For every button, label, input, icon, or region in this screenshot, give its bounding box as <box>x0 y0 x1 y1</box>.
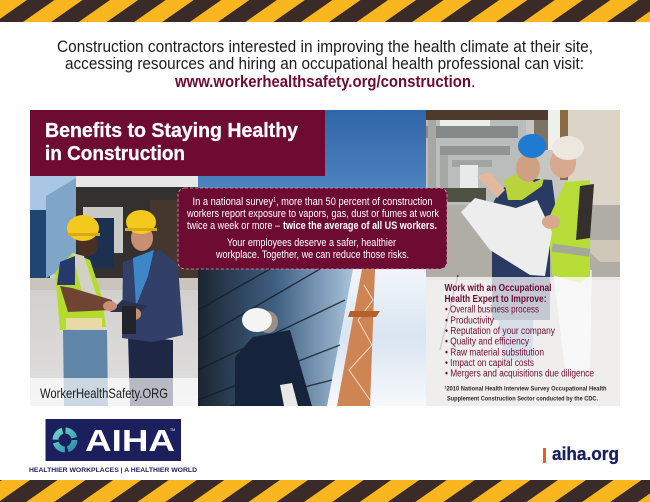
callout: survey statistic: Your employees deserve a safer, healthier <box>227 237 396 249</box>
blue helmet <box>518 134 546 158</box>
photo: man in white helmet looking at glass building and crane <box>198 269 426 406</box>
title panel: in Construction <box>45 143 185 165</box>
intro text: Construction contractors interested in improving the health climate at their site, <box>57 38 593 56</box>
worker head <box>78 237 98 256</box>
blueprint sheet <box>461 198 552 276</box>
man helmet <box>242 308 272 332</box>
photo: two engineers reviewing blueprint <box>426 110 620 406</box>
logo tagline: HEALTHIER WORKPLACES | A HEALTHIER WORLD <box>29 468 198 474</box>
list: occupational health expert benefits: • Productivity <box>445 315 494 326</box>
callout: survey statistic: twice the average of all US workers. <box>283 220 437 232</box>
callout: survey statistic: In a national survey <box>192 196 286 208</box>
engineer legs <box>498 320 534 360</box>
callout: survey statistic: 1 <box>273 198 277 204</box>
list: occupational health expert benefits: Work with an Occupational <box>444 283 552 294</box>
manager legs <box>128 336 173 406</box>
manager head <box>131 231 153 251</box>
website caption strip <box>30 378 198 406</box>
list: occupational health expert benefits: • Raw material substitution <box>445 347 544 358</box>
man body <box>235 330 312 406</box>
image panel: sky behind title and callout <box>198 110 426 270</box>
hazard stripe band: top <box>0 0 650 22</box>
crane tower <box>337 269 375 406</box>
manager suit <box>122 250 183 342</box>
footnote: Supplement Construction Sector conducted by the CDC. <box>447 396 598 403</box>
callout: survey statistic <box>178 188 447 269</box>
intro text <box>57 38 593 91</box>
list: occupational health expert benefits: • Quality and efficiency <box>445 337 529 348</box>
engineer woman <box>548 180 590 283</box>
list: occupational health expert benefits: • Impact on capital costs <box>445 358 534 369</box>
title panel: Benefits to Staying Healthy <box>45 120 299 142</box>
intro text: accessing resources and hiring an occupational health professional can visit: <box>65 55 584 73</box>
website caption strip: WorkerHealthSafety.ORG <box>40 385 168 401</box>
callout: survey statistic: twice a week or more – <box>187 220 280 232</box>
list: occupational health expert benefits <box>444 283 594 380</box>
worker legs <box>63 330 108 406</box>
list: occupational health expert benefits: Health Expert to Improve: <box>444 294 546 305</box>
engineer man <box>492 178 556 320</box>
AIHA logo <box>46 419 181 461</box>
photo: handshake between worker and manager <box>30 176 198 406</box>
list: occupational health expert benefits: • Reputation of your company <box>445 326 555 337</box>
AIHA logo: TM <box>170 428 175 432</box>
list: occupational health expert benefits: • Mergers and acquisitions due diligence <box>445 369 594 380</box>
hazard stripe band: bottom <box>0 480 650 502</box>
callout: survey statistic: workers report exposure to vapors, gas, dust or fumes at work <box>186 208 440 220</box>
intro text: www.workerhealthsafety.org/construction <box>174 73 471 91</box>
intro text: . <box>471 73 476 91</box>
list: occupational health expert benefits: • Overall business process <box>445 305 539 316</box>
worker vest and torso <box>55 253 106 330</box>
callout: survey statistic: , more than 50 percent of construction <box>276 196 432 208</box>
website link: aiha.org: aiha.org <box>552 444 619 464</box>
callout: survey statistic: workplace. Together, we can reduce those risks. <box>215 249 409 261</box>
footnote: 2010 National Health Interview Survey Occupational Health <box>446 386 606 393</box>
AIHA logo: AIHA <box>85 423 175 458</box>
translucent panel over lower right photo <box>426 277 620 406</box>
icon: teal ring <box>56 430 74 450</box>
title panel <box>30 110 325 176</box>
white helmet <box>552 136 584 160</box>
footnote <box>444 385 606 403</box>
footnote: 1 <box>444 385 447 390</box>
